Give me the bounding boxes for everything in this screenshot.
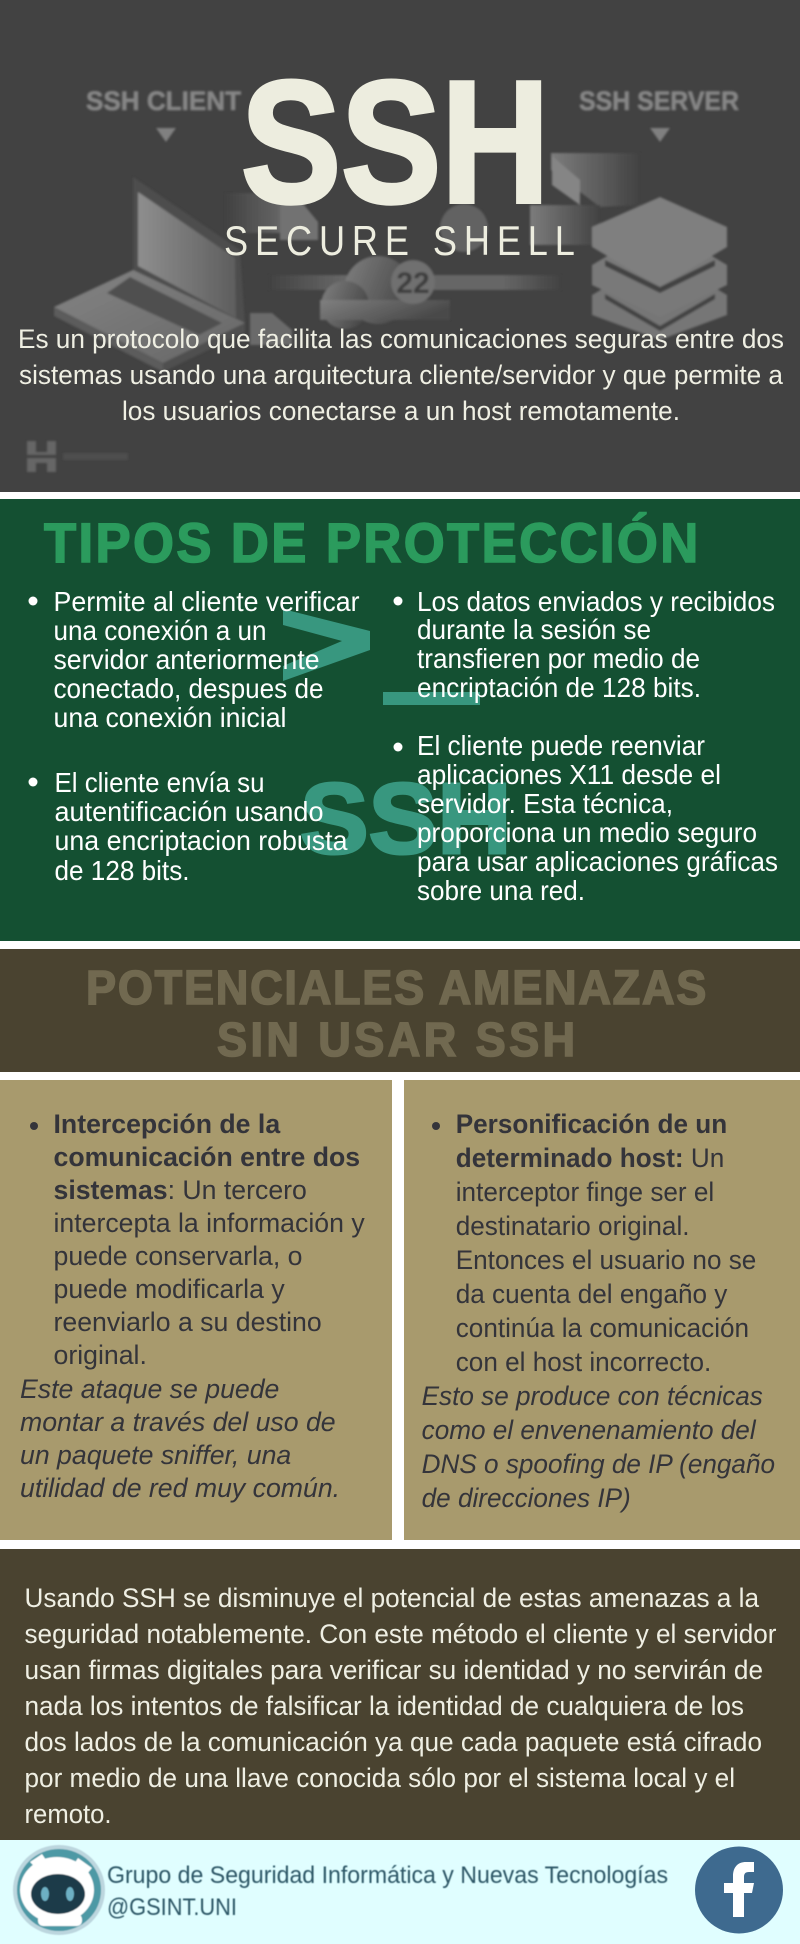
logo: hosting mark [27,441,128,472]
arrow: server [650,128,670,142]
panel: conclusión: nada los intentos de falsificar la identidad de cualquiera de los [24,1691,744,1721]
text: bullet aplicaciones X11 [394,730,778,906]
arrow: client [156,128,176,142]
heading: line 2: SIN USAR SSH [217,1013,575,1066]
watermark: SSH: SSH [300,763,511,874]
text: bullet autentificación: de 128 bits. [54,855,190,886]
label: SSH client: SSH CLIENT [86,86,241,116]
text: bullet aplicaciones X11: aplicaciones X11 desde el [417,759,721,790]
icon: server boxes [530,153,640,245]
text: bullet verificar conexión: Permite al cliente verificar [54,586,360,617]
heading: line 1: POTENCIALES AMENAZAS [86,961,706,1014]
text: bullet aplicaciones X11: El cliente puede reenviar [417,730,705,761]
icon: laptop [54,177,245,372]
text: bullet aplicaciones X11: proporciona un medio seguro [417,817,757,848]
text: note on spoofing: DNS o spoofing de IP (engaño [422,1449,775,1479]
text: bullet verificar conexión: servidor anteriormente [54,644,320,675]
icon: robot logo [13,1845,105,1935]
panel: conclusión: seguridad notablemente. Con este método el cliente y el servidor [24,1619,777,1649]
text: bullet datos enviados: transfieren por medio de [417,643,700,674]
text: intro description: Es un protocolo que facilita las comunicaciones seguras entre dos [18,324,784,354]
text: intro description [18,324,784,426]
text: note on sniffer [20,1374,340,1503]
icon: connection bar [269,275,561,290]
text: note on sniffer: montar a través del uso de [20,1407,336,1437]
panel: intercepción: puede conservarla, o [54,1241,302,1271]
icon: server stack [592,197,727,340]
text: bullet verificar conexión [28,586,360,733]
heading: tipos de protección: TIPOS DE PROTECCIÓN [44,512,698,574]
icon: cloud [320,204,488,329]
label: SSH server: SSH SERVER [579,86,739,116]
text: personificación bullet: Entonces el usuario no se [456,1245,756,1275]
panel: conclusión: usan firmas digitales para verificar su identidad y no servirán de [24,1655,763,1685]
icon: port 22 badge: 22 [396,267,430,300]
panel: conclusión [0,1549,800,1840]
text: bullet autentificación: El cliente envía su [54,767,264,798]
text: personificación bullet: destinatario original. [456,1211,690,1241]
text: bullet datos enviados: Los datos enviados y recibidos [417,586,775,617]
text: bullet autentificación: una encriptacion robusta [54,825,348,856]
text: intro description: los usuarios conectarse a un host remotamente. [122,396,680,426]
text: note on spoofing: de direcciones IP) [422,1483,631,1513]
icon: file top left [225,193,318,240]
text: bullet datos enviados [394,586,775,703]
icon: port 22 badge [391,260,435,304]
panel: hero [0,0,800,492]
panel: intercepción: intercepta la información y [54,1208,365,1238]
text: personificación bullet: continúa la comunicación [456,1313,749,1343]
panel: intercepción [0,1080,392,1540]
panel: tipos de protección [0,499,800,941]
text: personificación bullet: Personificación de un [456,1109,727,1139]
panel: footer [0,1840,800,1944]
panel: potenciales amenazas heading [0,949,800,1072]
text: note on spoofing [422,1381,775,1513]
text: bullet aplicaciones X11: servidor. Esta técnica, [417,788,673,819]
panel: intercepción: Intercepción de la [54,1109,280,1139]
icon: file bottom [250,313,292,345]
panel: personificación [404,1080,800,1540]
illustration: SSH client to server diagram [27,86,739,472]
text: note on sniffer: utilidad de red muy común. [20,1473,340,1503]
subtitle: Secure Shell: SECURE SHELL [224,219,575,265]
text: bullet verificar conexión: conectado, despues de [54,673,324,704]
panel: intercepción: comunicación entre dos [54,1142,360,1172]
text: bullet aplicaciones X11: sobre una red. [417,875,585,906]
text: bullet datos enviados: encriptación de 128 bits. [417,672,701,703]
text: bullet datos enviados: durante la sesión se [417,614,651,645]
text: group name: Grupo de Seguridad Informática y Nuevas Tecnologías [107,1862,668,1889]
text: note on spoofing: como el envenenamiento del [422,1415,757,1445]
text: note on spoofing: Esto se produce con técnicas [422,1381,763,1411]
text: bullet autentificación: autentificación usando [54,796,324,827]
panel: intercepción: sistemas: Un tercero [54,1175,307,1205]
panel: intercepción: original. [54,1340,147,1370]
text: bullet autentificación [28,767,348,886]
text: note on sniffer: un paquete sniffer, una [20,1440,291,1470]
panel: intercepción: puede modificarla y [54,1274,285,1304]
text: personificación bullet: determinado host: Un [456,1143,724,1173]
text: handle: @GSINT.UNI [107,1894,237,1921]
text: bullet verificar conexión: una conexión inicial [54,702,286,733]
panel: conclusión: remoto. [24,1799,112,1829]
text: personificación bullet: con el host incorrecto. [456,1347,711,1377]
text: intro description: sistemas usando una arquitectura cliente/servidor y que permite a [19,360,783,390]
text: note on sniffer: Este ataque se puede [20,1374,279,1404]
text: personificación bullet: interceptor finge ser el [456,1177,714,1207]
text: personificación bullet [456,1109,756,1377]
text: bullet verificar conexión: una conexión a un [54,615,266,646]
title: SSH: SSH [241,46,550,240]
panel: conclusión: por medio de una llave conocida sólo por el sistema local y el [24,1763,735,1793]
panel: conclusión: Usando SSH se disminuye el potencial de estas amenazas a la [24,1583,759,1613]
panel: intercepción: reenviarlo a su destino [54,1307,322,1337]
panel: conclusión: dos lados de la comunicación ya que cada paquete está cifrado [24,1727,762,1757]
text: personificación bullet: da cuenta del engaño y [456,1279,728,1309]
icon: terminal prompt watermark [283,609,511,874]
icon: facebook [695,1846,783,1934]
text: bullet aplicaciones X11: para usar aplicaciones gráficas [417,846,778,877]
